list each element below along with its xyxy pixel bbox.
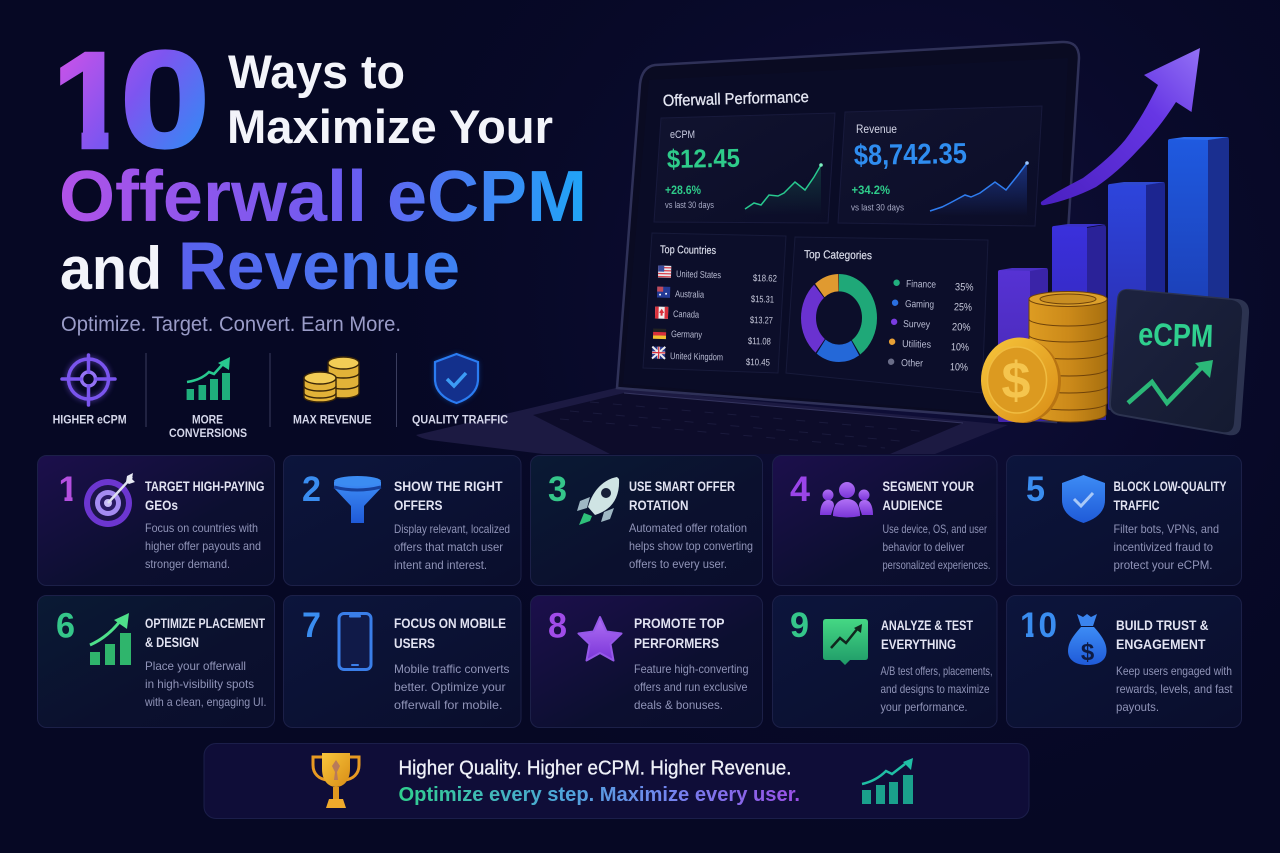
- title word: and: and: [60, 235, 162, 302]
- icon: analytics speech bubble: [823, 619, 868, 665]
- row: United Kingdom: $10.45: [746, 357, 770, 369]
- number 4: 4: [790, 470, 811, 509]
- card 9 text: EVERYTHING: [881, 637, 956, 652]
- dashboard title: Offerwall Performance: [663, 89, 809, 110]
- row: Australia: [657, 287, 774, 306]
- card 6 text: in high-visibility spots: [145, 677, 254, 691]
- label: quality traffic: QUALITY TRAFFIC: [412, 412, 508, 426]
- icon: quality shield: [435, 354, 478, 403]
- card 5 text: Filter bots, VPNs, and: [1114, 522, 1219, 536]
- panel: eCPM: [654, 113, 835, 223]
- card 5 text: incentivized fraud to: [1114, 540, 1213, 554]
- card 2 text: OFFERS: [394, 498, 442, 513]
- card 9 text: your performance.: [880, 700, 968, 714]
- banner line 1: Higher Quality. Higher eCPM. Higher Revenue.: [398, 758, 792, 780]
- title number 1: 1: [52, 24, 129, 178]
- legend: utilities: Utilities: [902, 339, 931, 351]
- card 1 text: higher offer payouts and: [145, 539, 261, 553]
- title word: Revenue: Revenue: [178, 228, 460, 304]
- number 3: 3: [548, 470, 567, 509]
- card 3 text: Automated offer rotation: [629, 521, 747, 535]
- icon: shield: [1062, 475, 1105, 523]
- legend: other: 10%: [950, 361, 968, 374]
- gold coin stack: [1029, 292, 1107, 422]
- card 7 text: USERS: [394, 636, 435, 651]
- legend: gaming: [892, 299, 972, 314]
- card 6 text: [144, 616, 266, 709]
- card 1 text: stronger demand.: [145, 557, 230, 571]
- card 8 text: Feature high-converting: [634, 662, 748, 676]
- eCPM label: eCPM: [670, 129, 695, 141]
- title line: Ways to: Ways to: [228, 45, 405, 98]
- icon: phone: [339, 614, 371, 670]
- card 9 text: and designs to maximize: [880, 682, 990, 696]
- icon: crosshair target: [62, 355, 115, 405]
- donut chart: [808, 283, 870, 353]
- card 8 text: PERFORMERS: [634, 636, 719, 651]
- label: more conversions: [169, 412, 247, 440]
- card 10: [1006, 596, 1242, 728]
- card 1 text: [145, 479, 264, 571]
- card 9 text: A/B test offers, placements,: [880, 664, 992, 678]
- card 7 text: Mobile traffic converts: [394, 662, 510, 676]
- big dollar coin: $: [1002, 352, 1031, 410]
- card 1: [38, 456, 274, 586]
- card 3 text: offers to every user.: [629, 557, 727, 571]
- card 1 text: GEOs: [145, 498, 178, 513]
- legend: gaming: 25%: [954, 301, 972, 314]
- laptop base: [416, 388, 1008, 454]
- icon: money bag: [1068, 614, 1106, 666]
- label: more conversions: CONVERSIONS: [169, 426, 247, 440]
- revenue sparkline: [930, 161, 1029, 216]
- card 10 text: Keep users engaged with: [1116, 664, 1232, 678]
- card 5 text: protect your eCPM.: [1114, 558, 1212, 572]
- 3D bar chart: [998, 137, 1229, 422]
- card 4 text: AUDIENCE: [882, 498, 942, 513]
- label: max revenue: MAX REVENUE: [293, 412, 372, 426]
- top countries heading: Top Countries: [660, 244, 717, 257]
- card 4 text: SEGMENT YOUR: [882, 479, 974, 494]
- card 2 text: offers that match user: [394, 540, 503, 554]
- row: Australia: $15.31: [751, 294, 774, 306]
- legend: gaming: Gaming: [905, 299, 934, 311]
- icon: coin stacks: [304, 357, 359, 402]
- row: United States: [658, 266, 777, 285]
- card 8 text: deals & bonuses.: [634, 698, 723, 712]
- row: Canada: Canada: [673, 309, 700, 321]
- icon: trophy: [313, 753, 359, 808]
- card 8 text: [634, 616, 748, 712]
- icon: star: [578, 617, 622, 660]
- title line: Maximize Your: Maximize Your: [227, 100, 553, 153]
- card 5 text: BLOCK LOW-QUALITY: [1114, 479, 1226, 494]
- benefit row: [53, 353, 508, 440]
- number 1: 1: [58, 470, 78, 509]
- panel: revenue: [838, 106, 1042, 226]
- card 6 text: Place your offerwall: [145, 659, 246, 673]
- label: more conversions: MORE: [192, 412, 223, 426]
- card 6 text: OPTIMIZE PLACEMENT: [145, 616, 266, 631]
- legend: utilities: [889, 338, 969, 354]
- eCPM comparison note: vs last 30 days: [665, 200, 714, 211]
- card 8 text: PROMOTE TOP: [634, 616, 724, 631]
- row: Australia: Australia: [675, 289, 705, 301]
- legend: survey: [891, 318, 971, 334]
- number 5: 5: [1026, 470, 1045, 509]
- legend: other: [888, 358, 968, 374]
- number 8: 8: [548, 606, 567, 646]
- bottom banner: [204, 744, 1029, 818]
- card 2 text: intent and interest.: [394, 558, 487, 572]
- card 10 text: ENGAGEMENT: [1116, 637, 1206, 652]
- card 6: [38, 596, 274, 728]
- legend: other: Other: [901, 358, 924, 370]
- card 5 text: [1114, 479, 1226, 572]
- legend: survey: Survey: [903, 319, 930, 331]
- row: United States: United States: [676, 269, 721, 281]
- card 6 text: & DESIGN: [145, 635, 199, 650]
- card 9: [772, 596, 997, 728]
- label: higher eCPM: HIGHER eCPM: [53, 412, 127, 426]
- card 7 text: FOCUS ON MOBILE: [394, 616, 506, 631]
- card 7 text: better. Optimize your: [394, 680, 506, 694]
- row: Canada: $13.27: [750, 315, 773, 327]
- title line: Offerwall eCPM: Offerwall eCPM: [59, 157, 587, 237]
- icon: bullseye target: [84, 473, 135, 527]
- card 7: [284, 596, 521, 728]
- card 4 text: Use device, OS, and user: [882, 522, 987, 536]
- card 4 text: [882, 479, 990, 572]
- card 2: [284, 456, 521, 586]
- panel: top countries: [643, 233, 786, 373]
- card 2 text: Display relevant, localized: [394, 522, 510, 536]
- row: Canada: [655, 307, 773, 327]
- legend: finance: Finance: [906, 279, 937, 291]
- title number 0: 0: [120, 23, 210, 177]
- card 1 text: Focus on countries with: [145, 521, 258, 535]
- revenue label: Revenue: [856, 124, 897, 136]
- icon: funnel: [334, 476, 381, 523]
- eCPM tile: [1109, 289, 1249, 435]
- card 5 text: TRAFFIC: [1114, 498, 1160, 513]
- bar 2: [1052, 224, 1106, 420]
- icon: rocket: [577, 477, 619, 525]
- card 3 text: [629, 479, 753, 571]
- legend: finance: [893, 279, 974, 294]
- card 3: [530, 456, 762, 586]
- icon: audience: [820, 482, 873, 518]
- card 8 text: offers and run exclusive: [634, 680, 748, 694]
- laptop screen: [623, 58, 1068, 418]
- tile label: eCPM: [1138, 316, 1214, 354]
- card 4: [772, 456, 997, 586]
- card 9 text: [880, 618, 992, 714]
- subtitle: Optimize. Target. Convert. Earn More.: [61, 313, 401, 336]
- row: United Kingdom: United Kingdom: [670, 351, 723, 363]
- tip cards: [38, 456, 1242, 728]
- card 5: [1006, 456, 1242, 586]
- big dollar coin: [981, 338, 1061, 423]
- laptop: [416, 42, 1079, 454]
- card 10 text: BUILD TRUST &: [1116, 618, 1209, 633]
- number 6: 6: [56, 606, 75, 646]
- number 10: 10: [1020, 606, 1057, 645]
- bar 3: [1108, 182, 1165, 410]
- revenue value: $8,742.35: [854, 138, 967, 172]
- revenue comparison note: vs last 30 days: [851, 202, 904, 214]
- card 10 text: [1116, 618, 1233, 714]
- icon: growth chart: [90, 613, 131, 665]
- panel: top categories: [786, 237, 988, 393]
- row: United Kingdom: [652, 347, 770, 369]
- row: Germany: Germany: [671, 329, 702, 341]
- title: [60, 49, 582, 290]
- card 6 text: with a clean, engaging UI.: [144, 695, 266, 709]
- bar 1: [998, 268, 1048, 422]
- icon: banner growth chart: [862, 758, 913, 804]
- legend: finance: 35%: [955, 281, 974, 294]
- card 3 text: helps show top converting: [629, 539, 753, 553]
- bar 4: [1168, 137, 1229, 410]
- revenue change: +34.2%: [852, 183, 890, 197]
- number 9: 9: [790, 606, 809, 645]
- icon: money bag: $: [1081, 639, 1095, 666]
- eCPM change: +28.6%: [665, 183, 701, 197]
- growth arrow: [1041, 48, 1200, 205]
- eCPM sparkline: [745, 163, 823, 215]
- card 8: [530, 596, 762, 728]
- top categories heading: Top Categories: [804, 249, 872, 262]
- card 10 text: payouts.: [1116, 700, 1159, 714]
- row: Germany: $11.08: [748, 336, 771, 348]
- card 4 text: behavior to deliver: [882, 540, 964, 554]
- row: Germany: [653, 329, 771, 348]
- card 2 text: [394, 479, 510, 572]
- card 4 text: personalized experiences.: [882, 558, 990, 572]
- card 3 text: USE SMART OFFER: [629, 479, 735, 494]
- legend: survey: 20%: [952, 321, 971, 334]
- card 3 text: ROTATION: [629, 498, 688, 513]
- laptop screen bezel: [617, 42, 1079, 422]
- card 7 text: offerwall for mobile.: [394, 698, 502, 712]
- eCPM value: $12.45: [667, 143, 740, 174]
- card 7 text: [394, 616, 510, 712]
- row: United States: $18.62: [753, 273, 777, 285]
- icon: growth bars: [187, 357, 230, 400]
- legend: utilities: 10%: [951, 341, 969, 354]
- card 10 text: rewards, levels, and fast: [1116, 682, 1233, 696]
- tile trend arrow: [1128, 360, 1213, 403]
- number 2: 2: [302, 470, 321, 509]
- banner line 2: Optimize every step. Maximize every user.: [398, 784, 800, 806]
- card 1 text: TARGET HIGH-PAYING: [145, 479, 264, 494]
- number 7: 7: [302, 606, 321, 645]
- card 2 text: SHOW THE RIGHT: [394, 479, 503, 494]
- card 9 text: ANALYZE & TEST: [881, 618, 974, 633]
